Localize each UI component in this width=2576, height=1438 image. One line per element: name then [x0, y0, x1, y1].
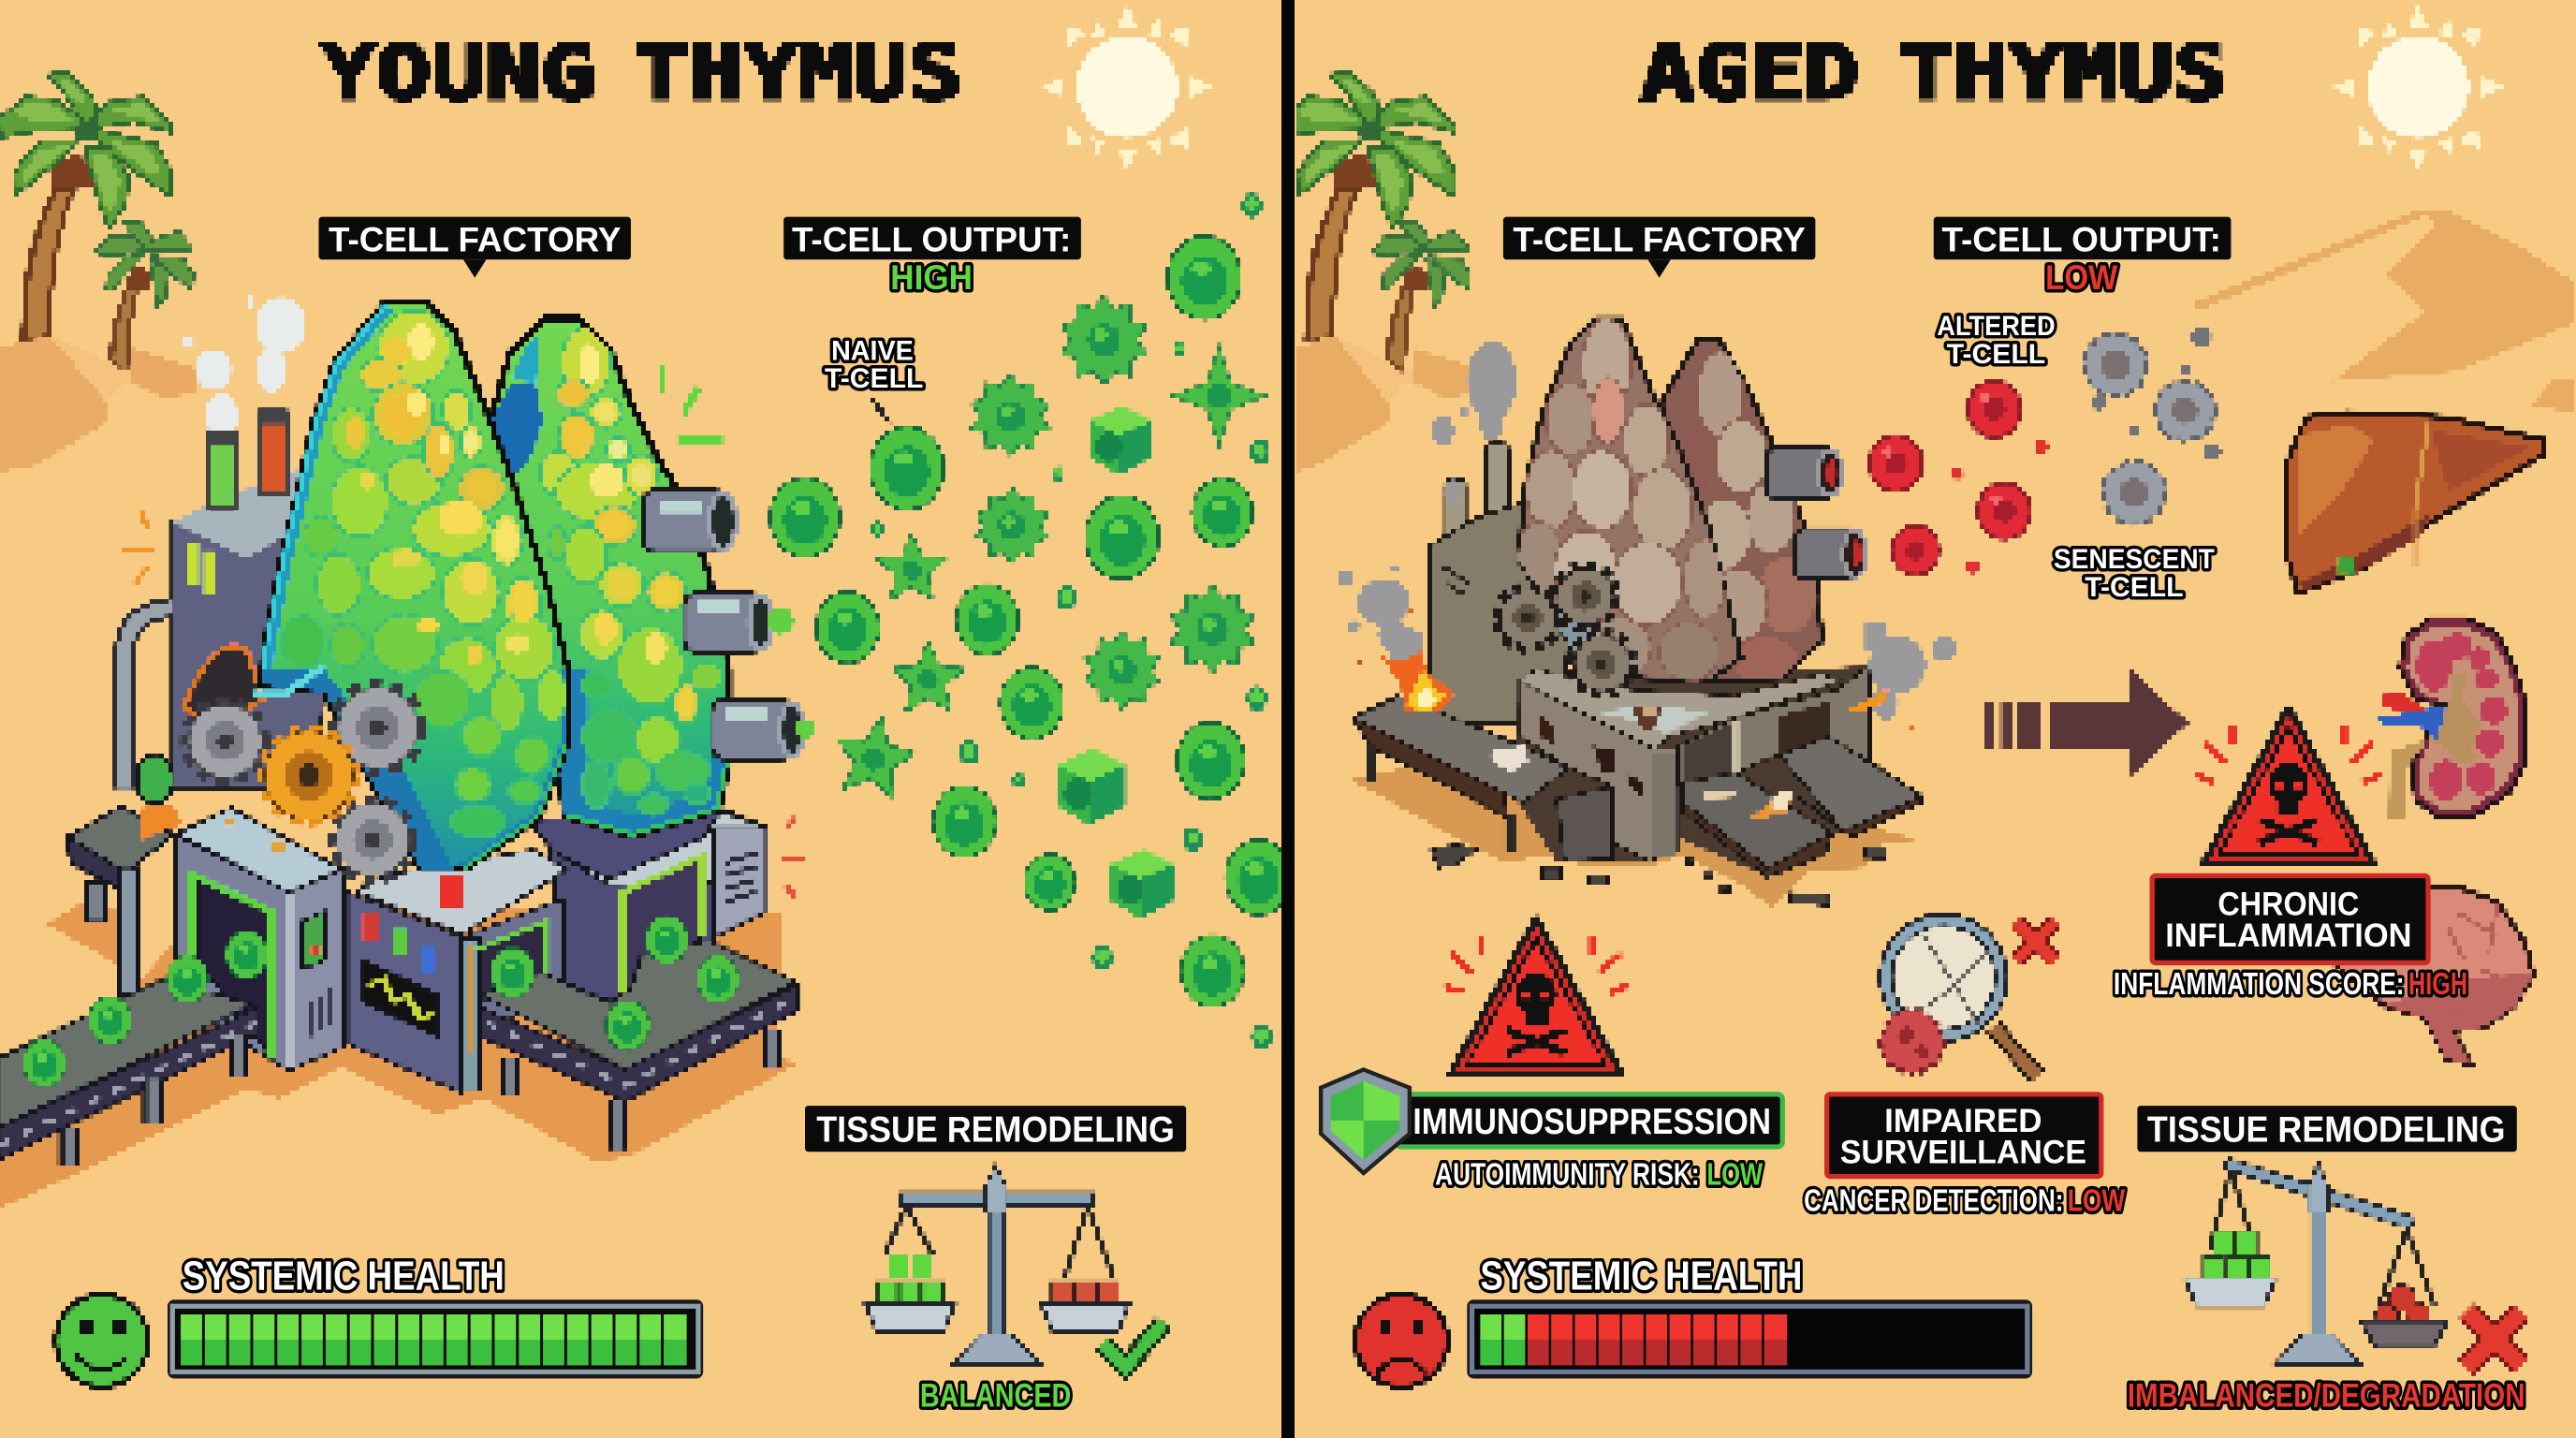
icon: back machine with tubes	[124, 407, 345, 788]
title: YOUNG	[321, 29, 595, 117]
label: t-cell factory young: T-CELL FACTORY	[329, 221, 621, 259]
label: t-cell factory young	[318, 217, 631, 278]
icon: magnifier with germ	[1881, 920, 2037, 1077]
icon: arrow	[1984, 670, 2188, 775]
icon: aged cannons	[1766, 448, 1866, 579]
label: senescent t-cell	[2054, 544, 2215, 603]
icon: smoke	[184, 296, 305, 437]
naive cell pointer	[872, 399, 890, 424]
center panel details	[362, 913, 547, 1053]
lobe right	[489, 318, 729, 836]
block B	[346, 850, 567, 1093]
smoke	[1339, 565, 1956, 719]
health bar full	[169, 1301, 701, 1377]
icon: shield	[1321, 1070, 1410, 1173]
label: senescent t-cell: T-CELL	[2085, 572, 2184, 603]
label: senescent t-cell: SENESCENT	[2054, 544, 2215, 575]
icon: red x	[2016, 922, 2056, 961]
label: inflammation score: INFLAMMATION SCORE:	[2114, 967, 2405, 1002]
left conveyor	[1354, 696, 1569, 852]
label: cancer detection: CANCER DETECTION:	[1804, 1183, 2063, 1218]
label: chronic inflammation: CHRONIC	[2217, 887, 2359, 923]
label: t-cell output high: T-CELL OUTPUT:	[792, 221, 1071, 259]
icon: aged machine body	[1431, 444, 1577, 723]
ground shadow and debris	[1350, 730, 1918, 906]
icon: aged top smoke	[1431, 342, 1516, 506]
label: naive t-cell: NAIVE	[831, 335, 914, 366]
title	[321, 29, 962, 117]
back conveyor	[68, 806, 173, 995]
label: altered t-cell: T-CELL	[1947, 339, 2045, 370]
icon: red x large	[2466, 1312, 2522, 1367]
label: impaired surveillance	[1827, 1094, 2101, 1177]
block C	[531, 808, 767, 1002]
icon: balanced scale	[866, 1165, 1129, 1364]
label: systemic health aged: SYSTEMIC HEALTH	[1480, 1254, 1802, 1299]
icon: altered red cells	[1868, 379, 2049, 577]
label: altered t-cell	[1937, 311, 2056, 370]
title: THYMUS	[634, 29, 962, 117]
icon: palm trees	[1283, 72, 1470, 374]
icon: sun	[2333, 5, 2504, 169]
icon: dunes	[1298, 209, 2576, 472]
icon: sad face	[1355, 1295, 1447, 1387]
icon: brain	[2331, 888, 2533, 1064]
icon: dunes	[0, 335, 198, 472]
divider	[1281, 0, 1295, 1438]
thymus lobes (aged)	[1516, 318, 1822, 685]
label: impaired surveillance: IMPAIRED	[1884, 1103, 2042, 1139]
panel: aged thymus illustration	[1283, 5, 2576, 1387]
label: t-cell factory aged: T-CELL FACTORY	[1513, 221, 1806, 259]
icon: tilted scale	[2185, 1158, 2448, 1364]
icon: sun	[1042, 5, 1212, 169]
lobe left	[1516, 318, 1741, 682]
title: AGED	[1640, 29, 1859, 117]
icon: young factory base	[0, 755, 798, 1208]
label: t-cell output high	[783, 217, 1081, 297]
label: cancer detection: LOW	[2068, 1183, 2126, 1218]
thymus lobes (young)	[253, 302, 729, 870]
label: systemic health young: SYSTEMIC HEALTH	[183, 1254, 505, 1299]
label: immunosuppression	[1397, 1094, 1782, 1147]
panel: young thymus illustration	[0, 5, 1293, 1387]
icon: aged factory base	[1339, 565, 1956, 906]
label: chronic inflammation	[2152, 875, 2428, 962]
icon: broken gears	[1497, 565, 1633, 695]
label: balanced: BALANCED	[920, 1377, 1071, 1414]
label: impaired surveillance: SURVEILLANCE	[1840, 1135, 2086, 1171]
icon: warning immunosuppression	[1444, 918, 1628, 1075]
lobe left	[261, 302, 568, 870]
health bar low	[1469, 1301, 2030, 1377]
title	[1640, 29, 2228, 117]
worker	[137, 755, 182, 841]
icon: happy face	[56, 1295, 148, 1387]
label: tissue remodeling young: TISSUE REMODELING	[816, 1110, 1175, 1151]
center block	[1520, 681, 1678, 861]
label: tissue remodeling aged: TISSUE REMODELING	[2147, 1110, 2506, 1151]
icon: senescent grey cells	[2085, 327, 2221, 524]
icon: gears	[185, 684, 421, 879]
label: t-cell output high: HIGH	[890, 258, 973, 297]
label: altered t-cell: ALTERED	[1937, 311, 2056, 342]
cyan pipe	[253, 666, 324, 694]
label: naive t-cell: T-CELL	[825, 363, 923, 394]
conveyor cells	[22, 916, 739, 1087]
flames	[1357, 607, 1916, 729]
right conveyor	[481, 940, 796, 1150]
label: autoimmunity risk: AUTOIMMUNITY RISK:	[1435, 1157, 1700, 1192]
label: t-cell output low: LOW	[2045, 258, 2118, 297]
icon: cannons	[642, 490, 815, 759]
label: t-cell output low	[1934, 217, 2231, 297]
label: immunosuppression: IMMUNOSUPPRESSION	[1412, 1102, 1771, 1142]
lobe right	[1661, 339, 1822, 685]
icon: sparks	[122, 365, 805, 897]
block A	[176, 808, 344, 1071]
title: THYMUS	[1899, 29, 2228, 117]
icon: check mark	[1103, 1323, 1164, 1367]
icon: kidney	[2379, 618, 2526, 819]
label: inflammation score: HIGH	[2408, 967, 2467, 1002]
label: t-cell output low: T-CELL OUTPUT:	[1942, 221, 2221, 259]
t-cell swarm	[769, 193, 1293, 1049]
label: chronic inflammation: INFLAMMATION	[2165, 917, 2411, 954]
icon: warning inflammation	[2197, 708, 2380, 864]
right block	[1678, 667, 1869, 786]
block A trim	[192, 819, 331, 1067]
label: autoimmunity risk: LOW	[1707, 1157, 1764, 1192]
icon: liver	[2285, 413, 2545, 594]
label layer	[169, 217, 2525, 1414]
label: naive t-cell	[825, 335, 923, 394]
label: t-cell factory aged	[1503, 217, 1815, 278]
left conveyor	[0, 979, 257, 1166]
ground shadow	[0, 905, 798, 1208]
backing	[1512, 667, 1922, 877]
roof	[1520, 669, 1840, 749]
icon: beacon	[440, 875, 463, 907]
right conveyors	[1682, 737, 1922, 877]
icon: palm trees	[0, 72, 194, 374]
